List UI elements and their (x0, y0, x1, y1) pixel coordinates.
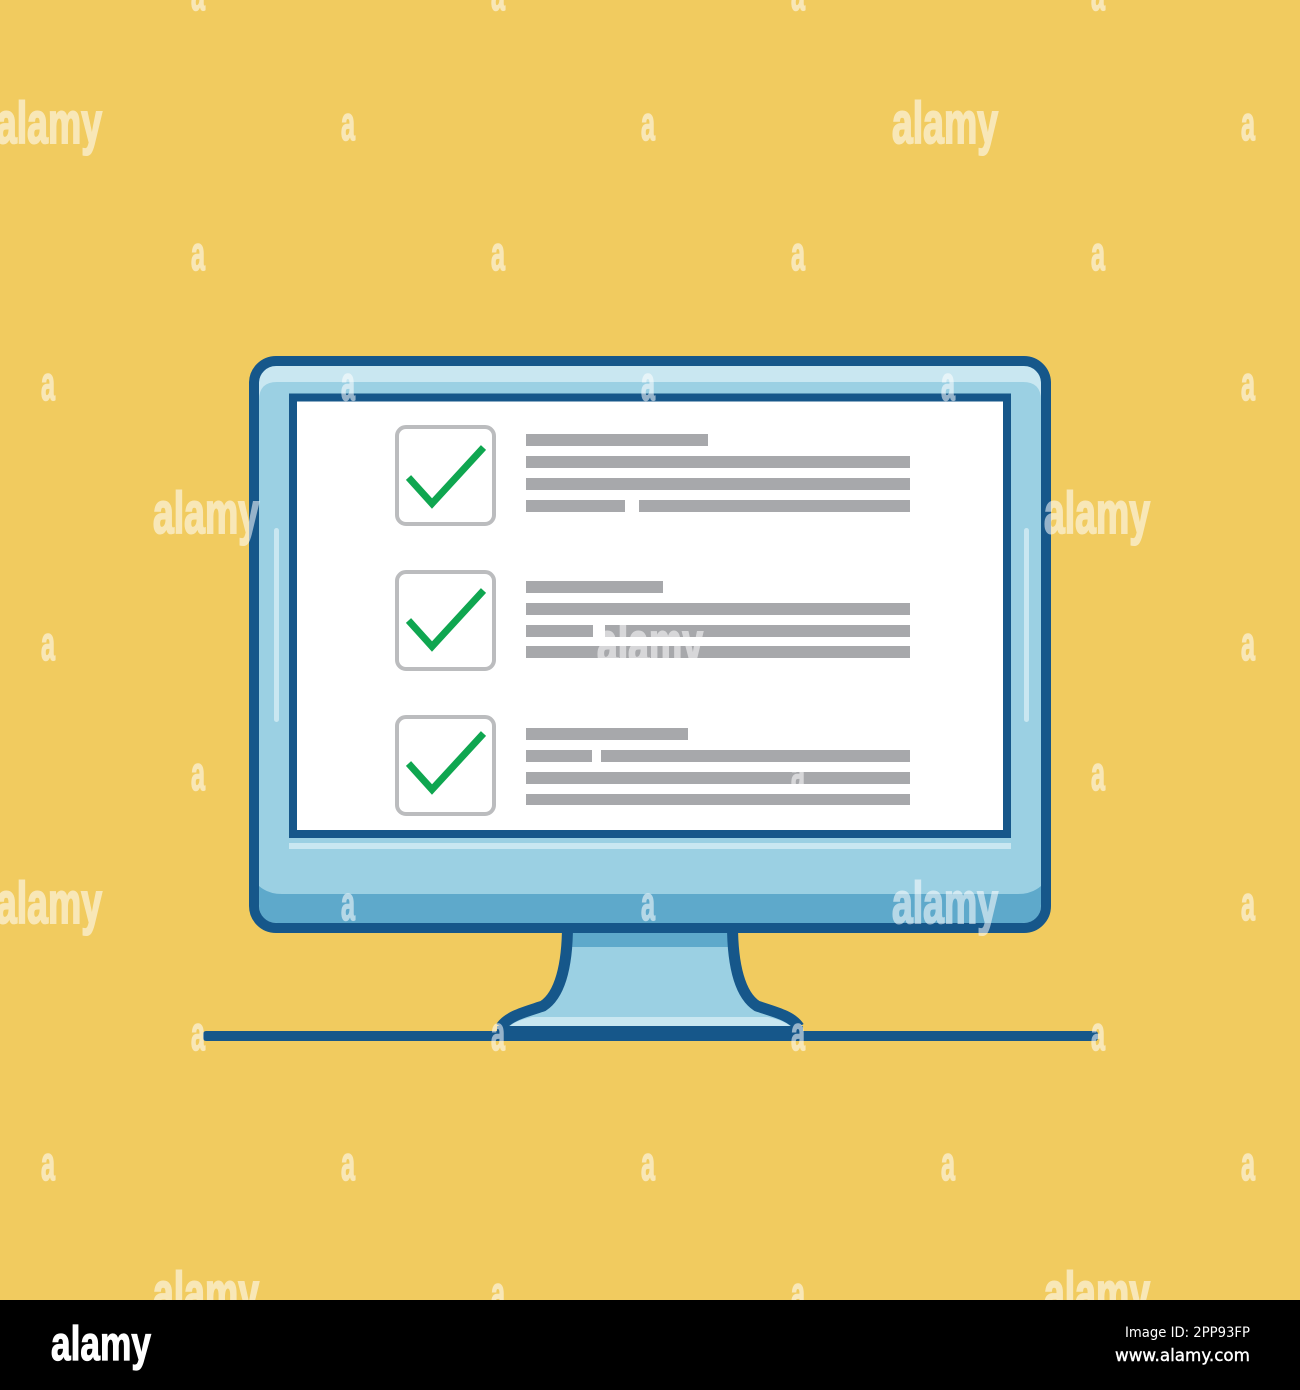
footer bar (0, 1300, 1300, 1390)
watermark letters: a (191, 1008, 205, 1061)
watermark letters: a (791, 1268, 805, 1321)
chin shade (259, 886, 1041, 923)
checklist item 3 (397, 717, 910, 814)
watermark letters: a (341, 98, 355, 151)
watermark letters: a (1241, 1138, 1255, 1191)
check mark (408, 448, 484, 504)
watermark letters: a (341, 1138, 355, 1191)
checkbox (397, 717, 494, 814)
watermark letters: a (791, 228, 805, 281)
watermark letters: a (1241, 98, 1255, 151)
watermark wordmarks: alamy (0, 871, 102, 936)
right side highlight (1024, 528, 1029, 722)
watermark letters: a (1091, 228, 1105, 281)
monitor stand (497, 925, 803, 1041)
text lines (526, 581, 910, 658)
watermark letters: a (1091, 1008, 1105, 1061)
checklist item 1 (397, 427, 910, 524)
watermark letters: a (1091, 748, 1105, 801)
watermark letters: a (491, 1268, 505, 1321)
left side highlight (274, 528, 279, 722)
watermark letters: a (491, 1008, 505, 1061)
watermark letters: a (41, 358, 55, 411)
bezel outline (254, 361, 1046, 928)
watermark wordmarks: alamy (1044, 1261, 1150, 1326)
watermark letters: a (341, 878, 355, 931)
text lines (526, 434, 910, 512)
chin highlight (289, 843, 1011, 849)
watermark letters: a (1241, 618, 1255, 671)
watermark letters: a (641, 358, 655, 411)
watermark letters: a (491, 228, 505, 281)
watermark wordmarks: alamy (892, 91, 998, 156)
watermark letters: a (341, 358, 355, 411)
watermark wordmarks: alamy (1044, 481, 1150, 546)
checkbox (397, 427, 494, 524)
watermark wordmarks: alamy (0, 91, 102, 156)
watermark wordmarks: alamy (153, 481, 259, 546)
checklist item 2 (397, 572, 910, 669)
watermark wordmarks: alamy (892, 871, 998, 936)
ground line (203, 1031, 1098, 1041)
watermark wordmarks: alamy (153, 1261, 259, 1326)
watermark letters: a (41, 618, 55, 671)
text lines (526, 728, 910, 805)
check mark (408, 590, 484, 646)
watermark letters: a (1241, 358, 1255, 411)
monitor body (254, 361, 1046, 928)
watermark wordmarks: alamy (597, 611, 703, 676)
website: www.alamy.com (1115, 1346, 1250, 1366)
watermark letters: a (941, 1138, 955, 1191)
watermark letters: a (641, 98, 655, 151)
watermark letters: a (641, 878, 655, 931)
watermark wordmarks (0, 91, 1150, 1326)
watermark letters: a (1241, 878, 1255, 931)
bezel top highlight (259, 366, 1041, 400)
watermark letters: a (941, 358, 955, 411)
watermark letters: a (641, 1138, 655, 1191)
watermark letters: a (191, 228, 205, 281)
watermark letters: a (791, 748, 805, 801)
bezel (254, 361, 1046, 928)
watermark letters: a (41, 1138, 55, 1191)
checkbox (397, 572, 494, 669)
watermark letters: a (791, 1008, 805, 1061)
check mark (408, 734, 484, 790)
watermark letters: a (191, 748, 205, 801)
screen (293, 398, 1007, 834)
image id: Image ID: 2PP93FP (1125, 1325, 1250, 1341)
footer logo: alamy (51, 1318, 151, 1371)
